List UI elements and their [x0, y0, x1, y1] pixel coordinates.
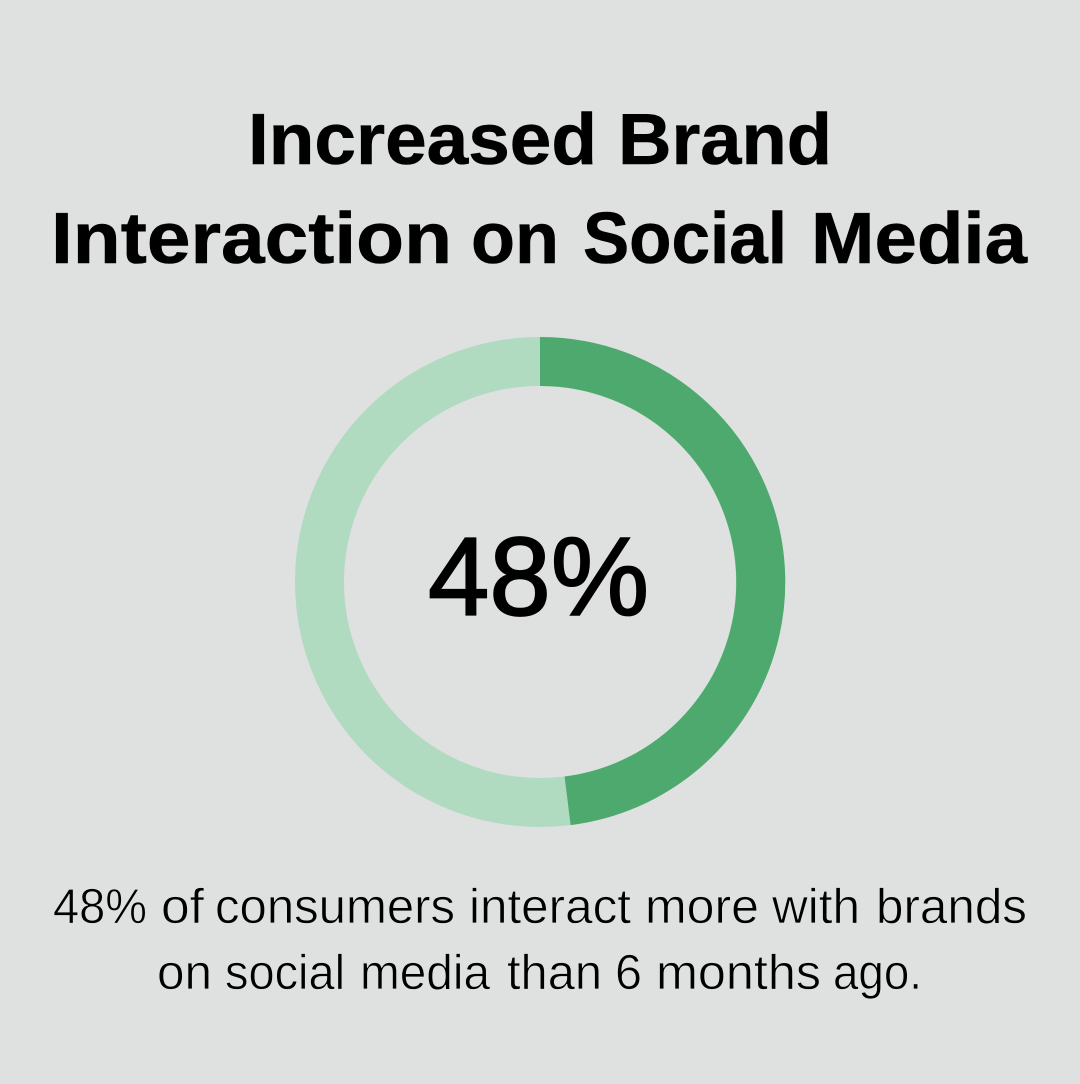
title: on: [471, 199, 559, 279]
title: Media: [811, 199, 1028, 279]
title: Brand: [618, 100, 832, 180]
title: Increased: [248, 100, 597, 180]
description: interact: [469, 880, 631, 934]
description: on: [157, 946, 212, 1000]
title: Interaction: [51, 199, 452, 279]
donut chart: 48%: [320, 361, 761, 802]
title: [51, 100, 1028, 279]
highlighted 48% arc: [540, 361, 761, 801]
title: Social: [583, 199, 787, 279]
description: brands: [876, 880, 1027, 934]
remaining ring segment: [320, 362, 760, 802]
description: ago.: [833, 946, 922, 1000]
description: 48%: [53, 880, 147, 934]
description: 6: [615, 946, 642, 1000]
description: than: [507, 946, 602, 1000]
description: with: [771, 880, 860, 934]
center value: 48%: [428, 515, 649, 639]
description: social: [225, 946, 345, 1000]
description: more: [645, 880, 759, 934]
description: [53, 880, 1027, 1000]
description: consumers: [215, 880, 455, 934]
description: media: [360, 946, 491, 1000]
description: of: [161, 880, 204, 934]
description: months: [656, 946, 821, 1000]
